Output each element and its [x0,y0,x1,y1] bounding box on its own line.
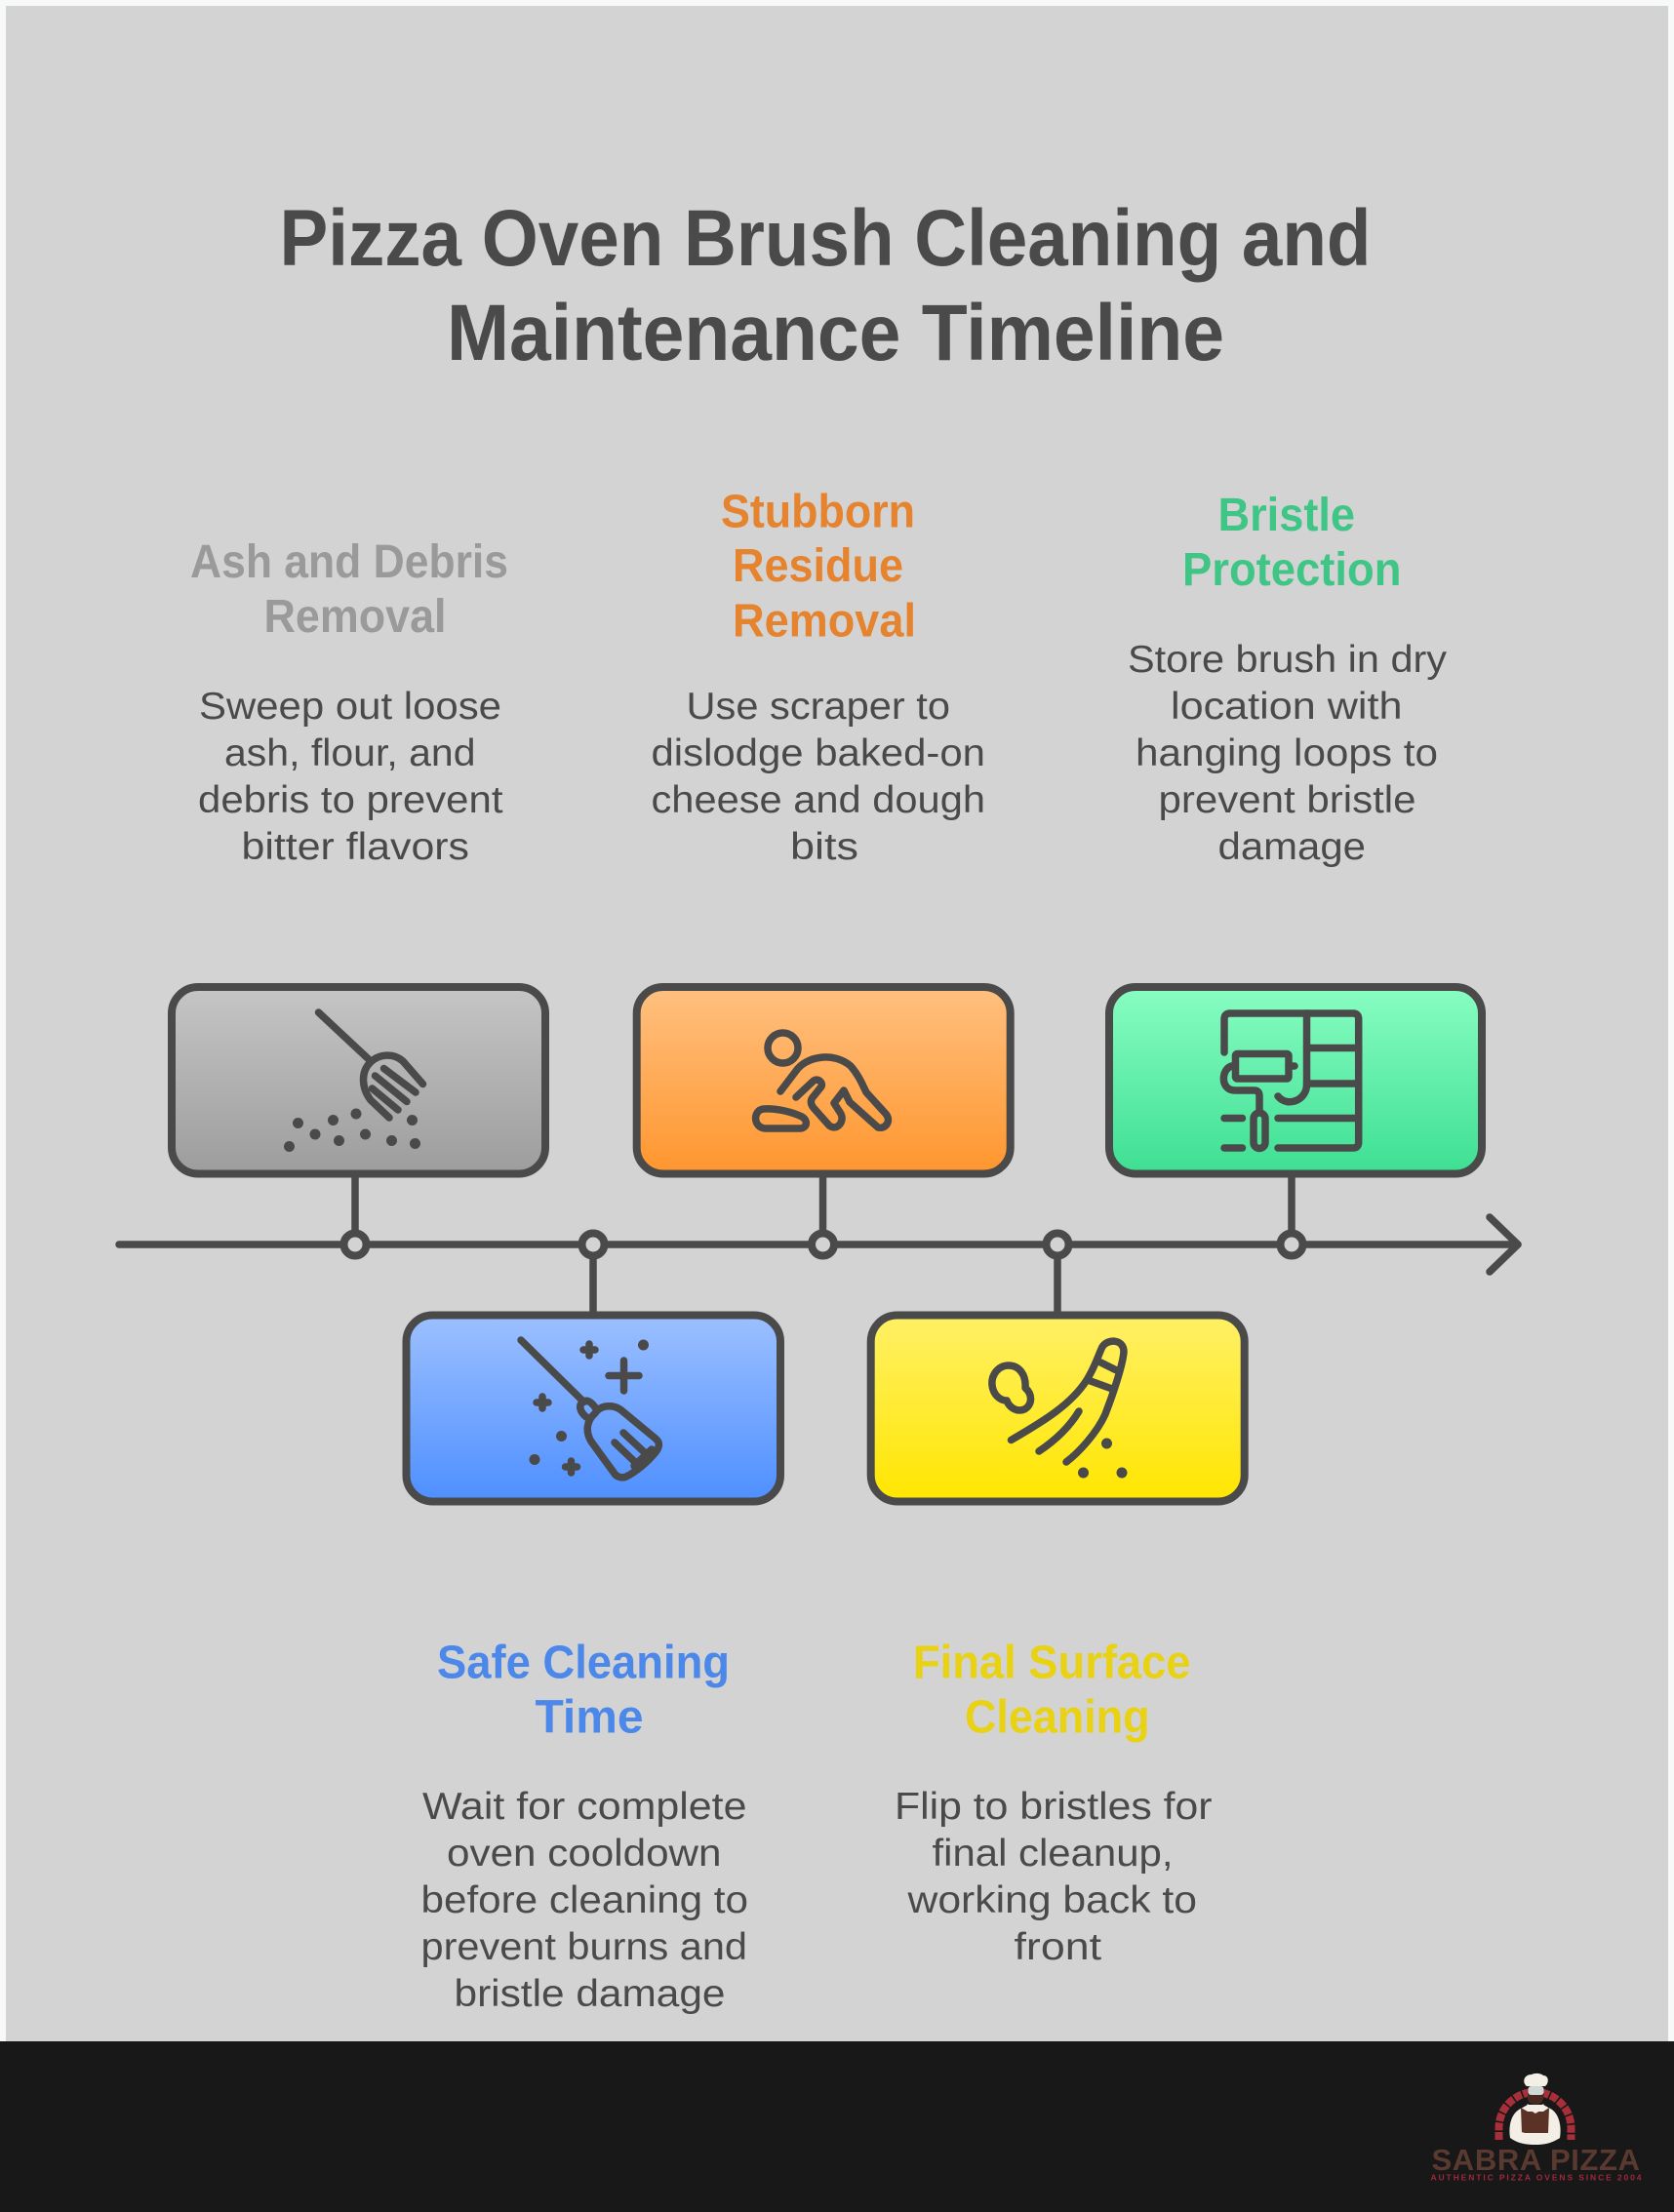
heading: Ash and Debris Removal: Ash and Debris [190,536,508,588]
text block: Final Surface Cleaning [895,1637,1213,1968]
description: Ash and Debris Removal: bitter flavors [242,826,469,868]
title: Pizza Oven Brush Cleaning and [279,194,1372,283]
heading: Safe Cleaning Time: Time [535,1691,644,1744]
heading: Stubborn Residue Removal [721,486,916,648]
title: Maintenance Timeline [447,289,1224,377]
description: Stubborn Residue Removal: Use scraper to [687,686,950,728]
card: Ash and Debris Removal [172,987,545,1174]
icon: broom with sparkles [521,1340,658,1478]
description: Bristle Protection: hanging loops to [1136,732,1438,774]
heading: Final Surface Cleaning: Cleaning [965,1691,1149,1744]
description: Stubborn Residue Removal: cheese and dough [652,779,985,821]
timeline axis with arrow [119,1217,1518,1272]
card: Bristle Protection [1109,987,1482,1174]
heading: Stubborn Residue Removal: Removal [733,595,916,648]
icon: person scrubbing [756,1033,888,1128]
timeline nodes [343,1233,1303,1256]
heading: Ash and Debris Removal [190,536,508,643]
heading: Stubborn Residue Removal: Residue [733,540,903,592]
description: Bristle Protection: location with [1171,686,1403,728]
icon: brick arch [1498,2092,1571,2140]
description: Safe Cleaning Time: oven cooldown [447,1833,722,1875]
logo: Sabra Pizza [1430,2074,1642,2183]
description: Stubborn Residue Removal [652,686,985,868]
description: Ash and Debris Removal: debris to prevent [198,779,503,821]
card: Final Surface Cleaning [871,1315,1245,1502]
description: Ash and Debris Removal: ash, flour, and [224,732,476,774]
heading: Safe Cleaning Time [437,1637,730,1744]
icon: paint roller and wall [1223,1013,1359,1149]
description: Safe Cleaning Time: bristle damage [455,1973,726,2015]
heading: Final Surface Cleaning [913,1637,1190,1744]
logo tagline: AUTHENTIC PIZZA OVENS SINCE 2004 [1430,2173,1642,2183]
description: Final Surface Cleaning: Flip to bristles for [895,1786,1213,1828]
description: Final Surface Cleaning: final cleanup, [933,1833,1173,1875]
heading: Bristle Protection: Protection [1182,544,1401,596]
heading: Final Surface Cleaning: Final Surface [913,1637,1190,1689]
description: Final Surface Cleaning [895,1786,1213,1968]
description: Ash and Debris Removal: Sweep out loose [199,686,501,728]
text block: Safe Cleaning Time [421,1637,748,2015]
description: Bristle Protection [1128,639,1448,868]
card: Safe Cleaning Time [406,1315,780,1502]
heading: Ash and Debris Removal: Removal [263,591,447,643]
description: Bristle Protection: Store brush in dry [1128,639,1448,681]
description: Final Surface Cleaning: working back to [906,1879,1197,1921]
description: Safe Cleaning Time [421,1786,748,2015]
icon: chef [1509,2074,1561,2145]
description: Safe Cleaning Time: Wait for complete [422,1786,747,1828]
text block: Bristle Protection [1128,490,1448,868]
icon: rake brush with debris [284,1012,423,1152]
heading: Bristle Protection [1182,490,1401,596]
text block: Ash and Debris Removal [190,536,508,868]
text block: Stubborn Residue Removal [652,486,985,868]
description: Safe Cleaning Time: before cleaning to [421,1879,748,1921]
title [279,194,1372,377]
description: Ash and Debris Removal [198,686,503,868]
description: Bristle Protection: prevent bristle [1159,779,1416,821]
heading: Stubborn Residue Removal: Stubborn [721,486,915,538]
description: Bristle Protection: damage [1217,826,1366,868]
heading: Safe Cleaning Time: Safe Cleaning [437,1637,730,1689]
card: Stubborn Residue Removal [637,987,1011,1174]
heading: Bristle Protection: Bristle [1217,490,1355,541]
description: Safe Cleaning Time: prevent burns and [421,1926,747,1968]
logo wordmark: SABRA PIZZA [1432,2143,1640,2177]
description: Stubborn Residue Removal: dislodge baked-on [652,732,985,774]
connectors [355,1175,1292,1314]
footer bar [0,2041,1674,2212]
icon: brush with dough residue [992,1341,1128,1479]
description: Final Surface Cleaning: front [1015,1926,1101,1968]
description: Stubborn Residue Removal: bits [790,826,858,868]
